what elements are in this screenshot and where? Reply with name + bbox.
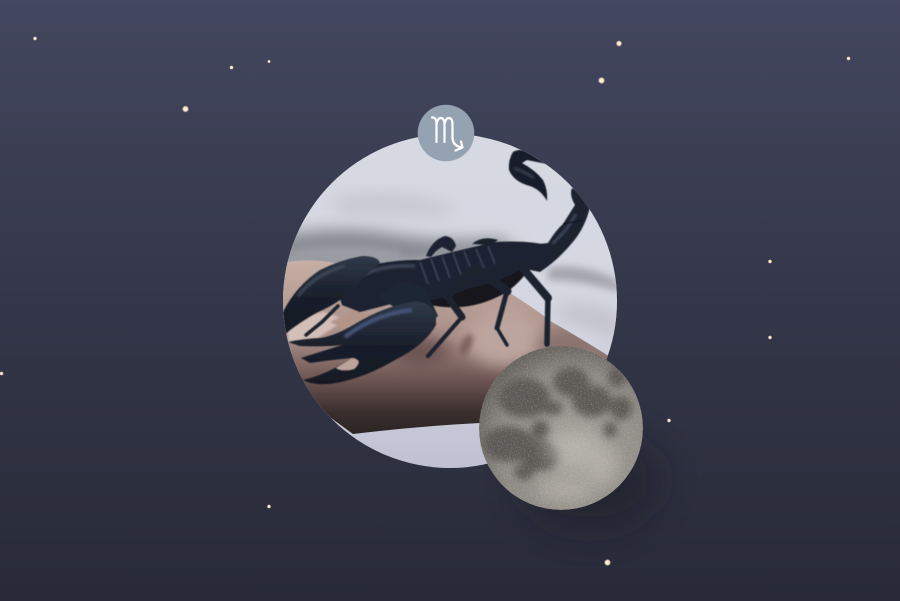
lunar maria	[482, 367, 632, 480]
hand	[278, 258, 618, 434]
scorpion stinger	[509, 150, 547, 201]
zodiac badge	[418, 105, 474, 161]
photo background	[280, 130, 620, 470]
moon	[479, 345, 643, 510]
scorpion legs	[306, 265, 548, 356]
scorpion front claw	[288, 302, 436, 384]
scorpion	[283, 150, 590, 384]
photo disc: scorpion on a hand	[278, 130, 620, 470]
scorpion underside	[430, 270, 524, 308]
icon: scorpio glyph	[432, 117, 462, 150]
scorpion body	[338, 242, 550, 312]
moon shadow	[518, 430, 662, 530]
scorpion rear claw	[283, 256, 380, 334]
scorpion legs behind	[426, 236, 456, 257]
scorpion tail	[530, 188, 590, 273]
